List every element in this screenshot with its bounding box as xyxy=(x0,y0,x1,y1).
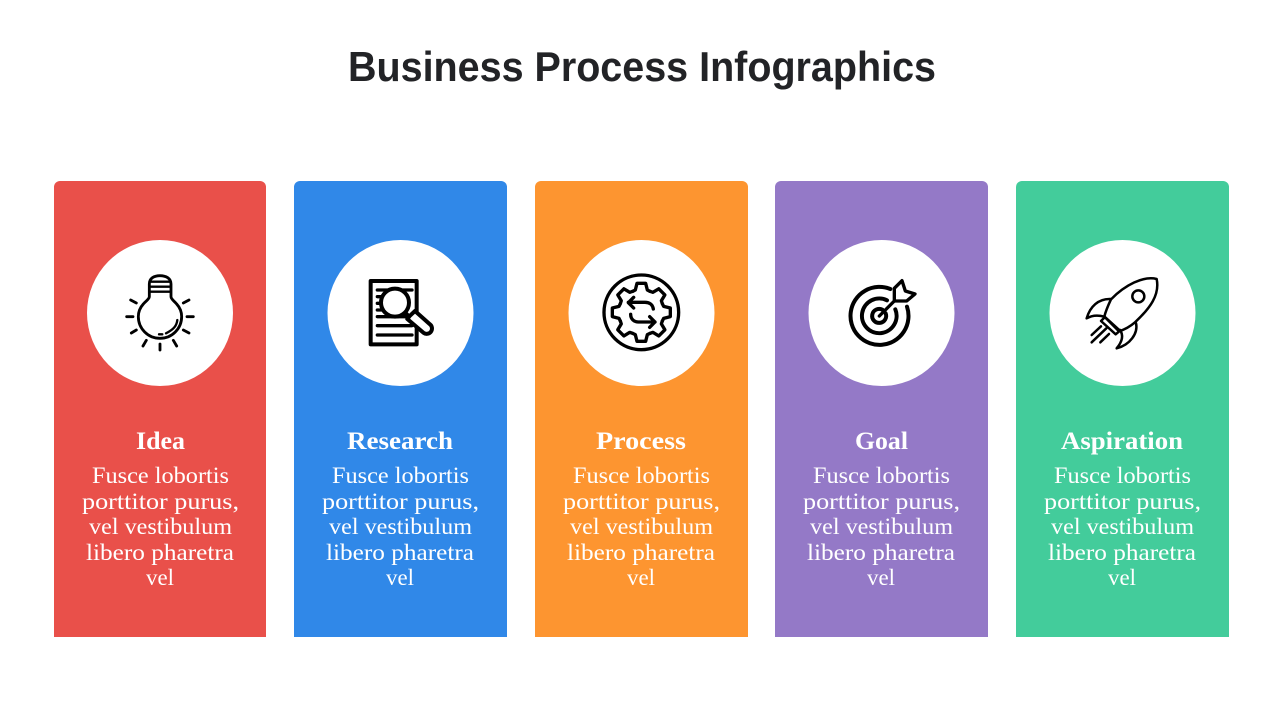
body text: Fusce lobortis xyxy=(332,463,469,488)
body text: vel xyxy=(867,565,895,590)
heading: Idea xyxy=(136,428,186,455)
body text: vel vestibulum xyxy=(89,514,232,539)
body text: vel vestibulum xyxy=(329,514,472,539)
body text: porttitor purus, xyxy=(563,489,720,514)
icon: gear with arrows xyxy=(604,275,679,350)
body text: Fusce lobortis xyxy=(1054,463,1191,488)
icon: rocket xyxy=(1087,278,1157,348)
body text: libero pharetra xyxy=(1048,540,1196,565)
body text: vel xyxy=(386,565,414,590)
body text: libero pharetra xyxy=(567,540,715,565)
body text: porttitor purus, xyxy=(322,489,479,514)
title: Business Process Infographics xyxy=(348,43,936,90)
panel: Aspiration xyxy=(1016,181,1229,637)
heading: Aspiration xyxy=(1061,428,1183,455)
body text: porttitor purus, xyxy=(1044,489,1201,514)
body text: Fusce lobortis xyxy=(813,463,950,488)
body text xyxy=(563,463,720,590)
icon: light bulb xyxy=(127,276,193,350)
panel: Research xyxy=(294,181,507,637)
body text: Fusce lobortis xyxy=(573,463,710,488)
icon: document with magnifier xyxy=(371,281,432,344)
body text: vel vestibulum xyxy=(810,514,953,539)
body text: porttitor purus, xyxy=(82,489,239,514)
body text: vel xyxy=(146,565,174,590)
body text: vel xyxy=(627,565,655,590)
body text xyxy=(322,463,479,590)
icon: target with arrow xyxy=(851,281,915,345)
body text: vel xyxy=(1108,565,1136,590)
body text: vel vestibulum xyxy=(1051,514,1194,539)
body text xyxy=(1044,463,1201,590)
body text xyxy=(82,463,239,590)
body text: Fusce lobortis xyxy=(92,463,229,488)
body text: vel vestibulum xyxy=(570,514,713,539)
panel: Idea xyxy=(54,181,266,637)
heading: Research xyxy=(347,428,453,455)
body text: libero pharetra xyxy=(326,540,474,565)
body text xyxy=(803,463,960,590)
panel: Goal xyxy=(775,181,988,637)
body text: libero pharetra xyxy=(807,540,955,565)
heading: Goal xyxy=(855,428,908,455)
body text: porttitor purus, xyxy=(803,489,960,514)
body text: libero pharetra xyxy=(86,540,234,565)
panel: Process xyxy=(535,181,748,637)
heading: Process xyxy=(596,428,686,455)
